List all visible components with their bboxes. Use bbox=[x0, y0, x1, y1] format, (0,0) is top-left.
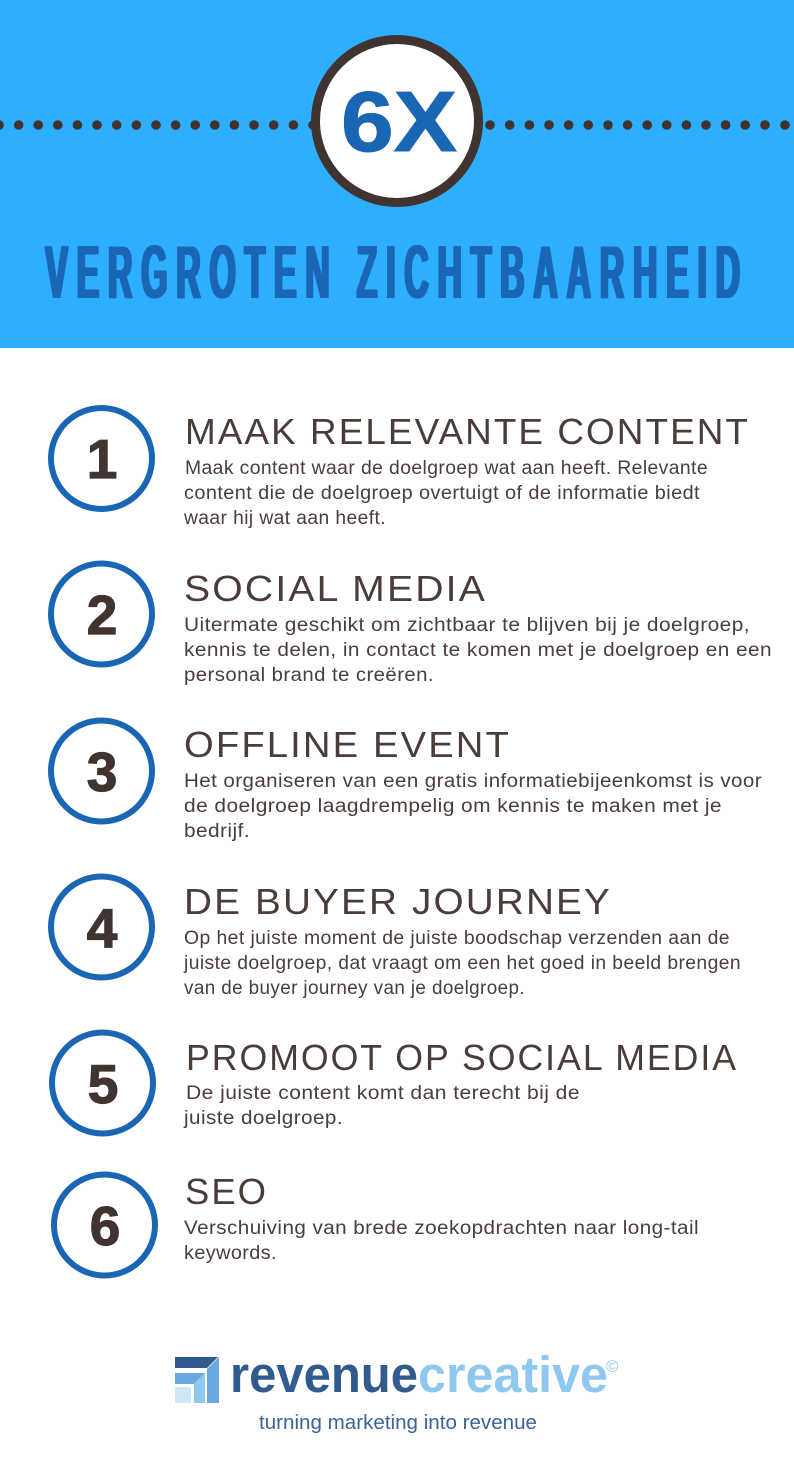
text: step 3 body: de doelgroep laagdrempelig om kennis te maken met je bbox=[184, 796, 722, 817]
dotted line right bbox=[485, 120, 790, 130]
heading: step 6: SEO bbox=[185, 1171, 268, 1212]
wordmark: revenue bbox=[230, 1346, 418, 1403]
text: step 3 body bbox=[184, 771, 762, 842]
panel: header banner bbox=[0, 0, 794, 348]
icon: number 5 bbox=[52, 1032, 153, 1134]
heading: step 3: OFFLINE EVENT bbox=[184, 724, 511, 765]
text: step 1 body: waar hij wat aan heeft. bbox=[183, 508, 386, 529]
text: step 4 body: juiste doelgroep, dat vraagt om een het goed in beeld brengen bbox=[183, 953, 741, 974]
wordmark: © bbox=[606, 1357, 619, 1376]
text: step 6 body: keywords. bbox=[184, 1243, 277, 1264]
wordmark: creative bbox=[418, 1346, 608, 1403]
text: step 3 body: bedrijf. bbox=[184, 821, 250, 842]
badge: 6X: 6X bbox=[341, 75, 457, 170]
text: step 1 body bbox=[183, 458, 708, 529]
icon: logo mark bbox=[175, 1357, 219, 1403]
heading: step 2: SOCIAL MEDIA bbox=[184, 568, 487, 609]
icon: number 5: 5 bbox=[88, 1053, 118, 1115]
icon: number 1: 1 bbox=[87, 428, 117, 490]
text: step 5 body: juiste doelgroep. bbox=[183, 1108, 343, 1129]
icon: number 3: 3 bbox=[87, 741, 117, 803]
tagline: turning marketing into revenue bbox=[259, 1412, 537, 1434]
text: step 5 body: De juiste content komt dan terecht bij de bbox=[186, 1083, 580, 1104]
panel: step 5 bbox=[52, 1032, 738, 1134]
text: step 5 body bbox=[183, 1083, 580, 1129]
text: step 3 body: Het organiseren van een gratis informatiebijeenkomst is voor bbox=[184, 771, 762, 792]
icon: number 1 bbox=[51, 408, 152, 509]
icon: number 6 bbox=[54, 1174, 155, 1276]
text: step 4 body: van de buyer journey van je doelgroep. bbox=[184, 978, 525, 999]
text: step 2 body bbox=[184, 615, 772, 686]
dotted line left bbox=[0, 120, 318, 130]
icon: number 6: 6 bbox=[90, 1195, 120, 1257]
text: step 1 body: Maak content waar de doelgroep wat aan heeft. Relevante bbox=[185, 458, 708, 479]
text: step 4 body bbox=[183, 928, 741, 999]
text: step 2 body: kennis te delen, in contact te komen met je doelgroep en een bbox=[184, 640, 772, 661]
text: step 4 body: Op het juiste moment de juiste boodschap verzenden aan de bbox=[184, 928, 730, 949]
badge: 6X bbox=[316, 40, 478, 202]
wordmark bbox=[230, 1346, 619, 1403]
panel: step 1 bbox=[51, 408, 750, 529]
text: step 6 body: Verschuiving van brede zoekopdrachten naar long-tail bbox=[184, 1218, 699, 1239]
icon: number 2: 2 bbox=[87, 584, 117, 646]
heading: step 4: DE BUYER JOURNEY bbox=[184, 881, 612, 922]
heading: step 5: PROMOOT OP SOCIAL MEDIA bbox=[186, 1037, 738, 1078]
icon: number 4: 4 bbox=[87, 897, 118, 959]
icon: number 2 bbox=[51, 564, 152, 664]
panel: step 4 bbox=[51, 876, 741, 999]
text: step 6 body bbox=[184, 1218, 699, 1264]
heading: step 1: MAAK RELEVANTE CONTENT bbox=[185, 411, 750, 452]
logo: revenuecreative bbox=[175, 1346, 619, 1434]
text: step 2 body: personal brand te creëren. bbox=[184, 665, 434, 686]
icon: number 3 bbox=[51, 720, 152, 822]
text: step 2 body: Uitermate geschikt om zichtbaar te blijven bij je doelgroep, bbox=[184, 615, 750, 636]
panel: step 2 bbox=[51, 564, 772, 686]
text: step 1 body: content die de doelgroep overtuigt of de informatie biedt bbox=[184, 483, 700, 504]
panel: step 3 bbox=[51, 720, 762, 842]
panel: step 6 bbox=[54, 1171, 699, 1276]
icon: number 4 bbox=[51, 876, 152, 978]
